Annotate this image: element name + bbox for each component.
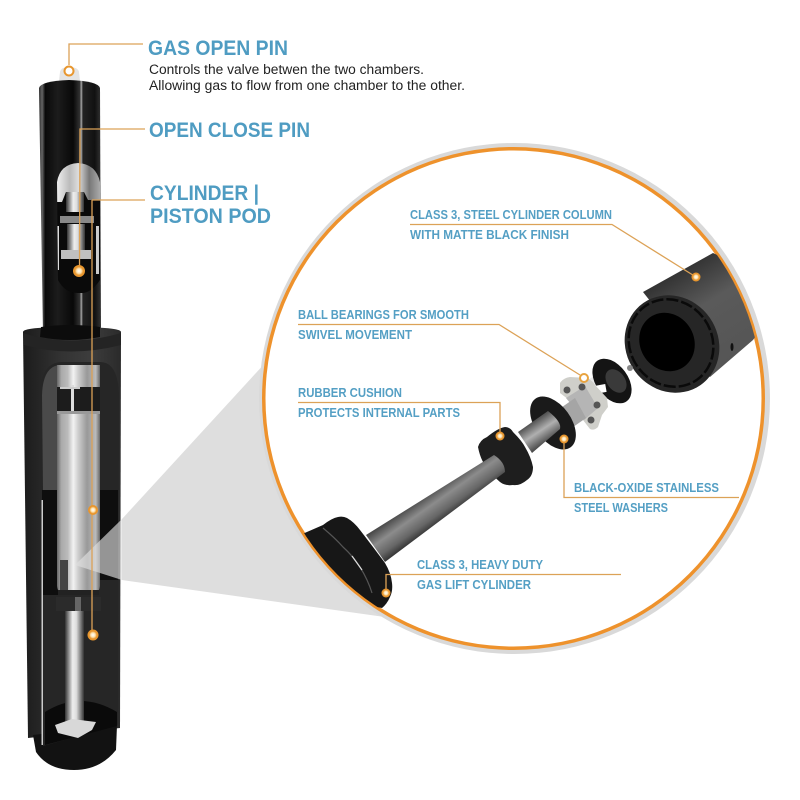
main shaft [366,455,505,562]
heading: cylinder piston pod [92,182,271,228]
label: black-oxide washers: BLACK-OXIDE STAINLESS [574,480,719,495]
heading: open close pin: OPEN CLOSE PIN [149,119,310,142]
label: rubber cushion: RUBBER CUSHION [298,385,402,400]
washer 1 [521,388,585,458]
callout dot [64,66,74,76]
upper black tube [39,80,101,335]
callout line [69,44,143,65]
steel cylinder column [643,253,755,377]
upper shaft right segment [555,398,586,432]
ball bearing assembly [560,377,608,430]
rubber cushion [478,427,533,485]
callout dot: upper [88,505,98,515]
exploded parts [300,253,790,608]
label: steel cylinder column: WITH MATTE BLACK FINISH [410,227,569,242]
upper shaft left segment [518,411,560,453]
gas open pin tip [59,67,80,81]
piston collar [56,597,101,611]
label: black-oxide washers: STEEL WASHERS [574,500,668,515]
label: rubber cushion: PROTECTS INTERNAL PARTS [298,405,460,420]
wedge overlay on cutaway [75,519,122,580]
label: rubber cushion [298,385,504,440]
lower body window [40,362,119,746]
label: heavy duty gas lift: GAS LIFT CYLINDER [417,577,532,592]
upper tube window [57,163,100,293]
label: heavy duty gas lift: CLASS 3, HEAVY DUTY [417,557,543,572]
description text: Allowing gas to flow from one chamber to the other. [149,78,465,93]
description text [149,62,465,93]
cutaway callout lines and dots [88,200,98,640]
base [33,725,117,770]
heading: open close pin [73,119,310,277]
glass cylinder [57,365,100,595]
callout dot: lower [88,630,98,640]
callout line [80,129,145,270]
label: ball bearings: BALL BEARINGS FOR SMOOTH [298,307,469,322]
column end face [606,277,738,411]
piston rod [65,611,84,723]
heading: gas open pin [64,37,288,76]
heading: gas open pin: GAS OPEN PIN [148,37,288,60]
callout dot [73,265,85,277]
heading: cylinder piston pod: PISTON POD [150,205,271,228]
washer 2 with hub [584,351,640,411]
label: black-oxide washers [560,434,739,515]
label: ball bearings [298,307,588,382]
label: steel cylinder column [410,207,700,282]
label: heavy duty gas lift [382,557,621,598]
base cap [300,517,392,608]
heading: cylinder piston pod: CYLINDER | [150,182,259,205]
icon: gas lift cylinder cutaway [23,67,121,770]
grey projection wedge [122,325,385,617]
magnifier circle [259,143,770,654]
rod foot [55,719,96,738]
label: steel cylinder column: CLASS 3, STEEL CYLINDER COLUMN [410,207,612,222]
description text: Controls the valve betwen the two chambers. [149,62,424,77]
lower body [23,327,121,738]
label: ball bearings: SWIVEL MOVEMENT [298,327,412,342]
callout line [92,199,145,201]
